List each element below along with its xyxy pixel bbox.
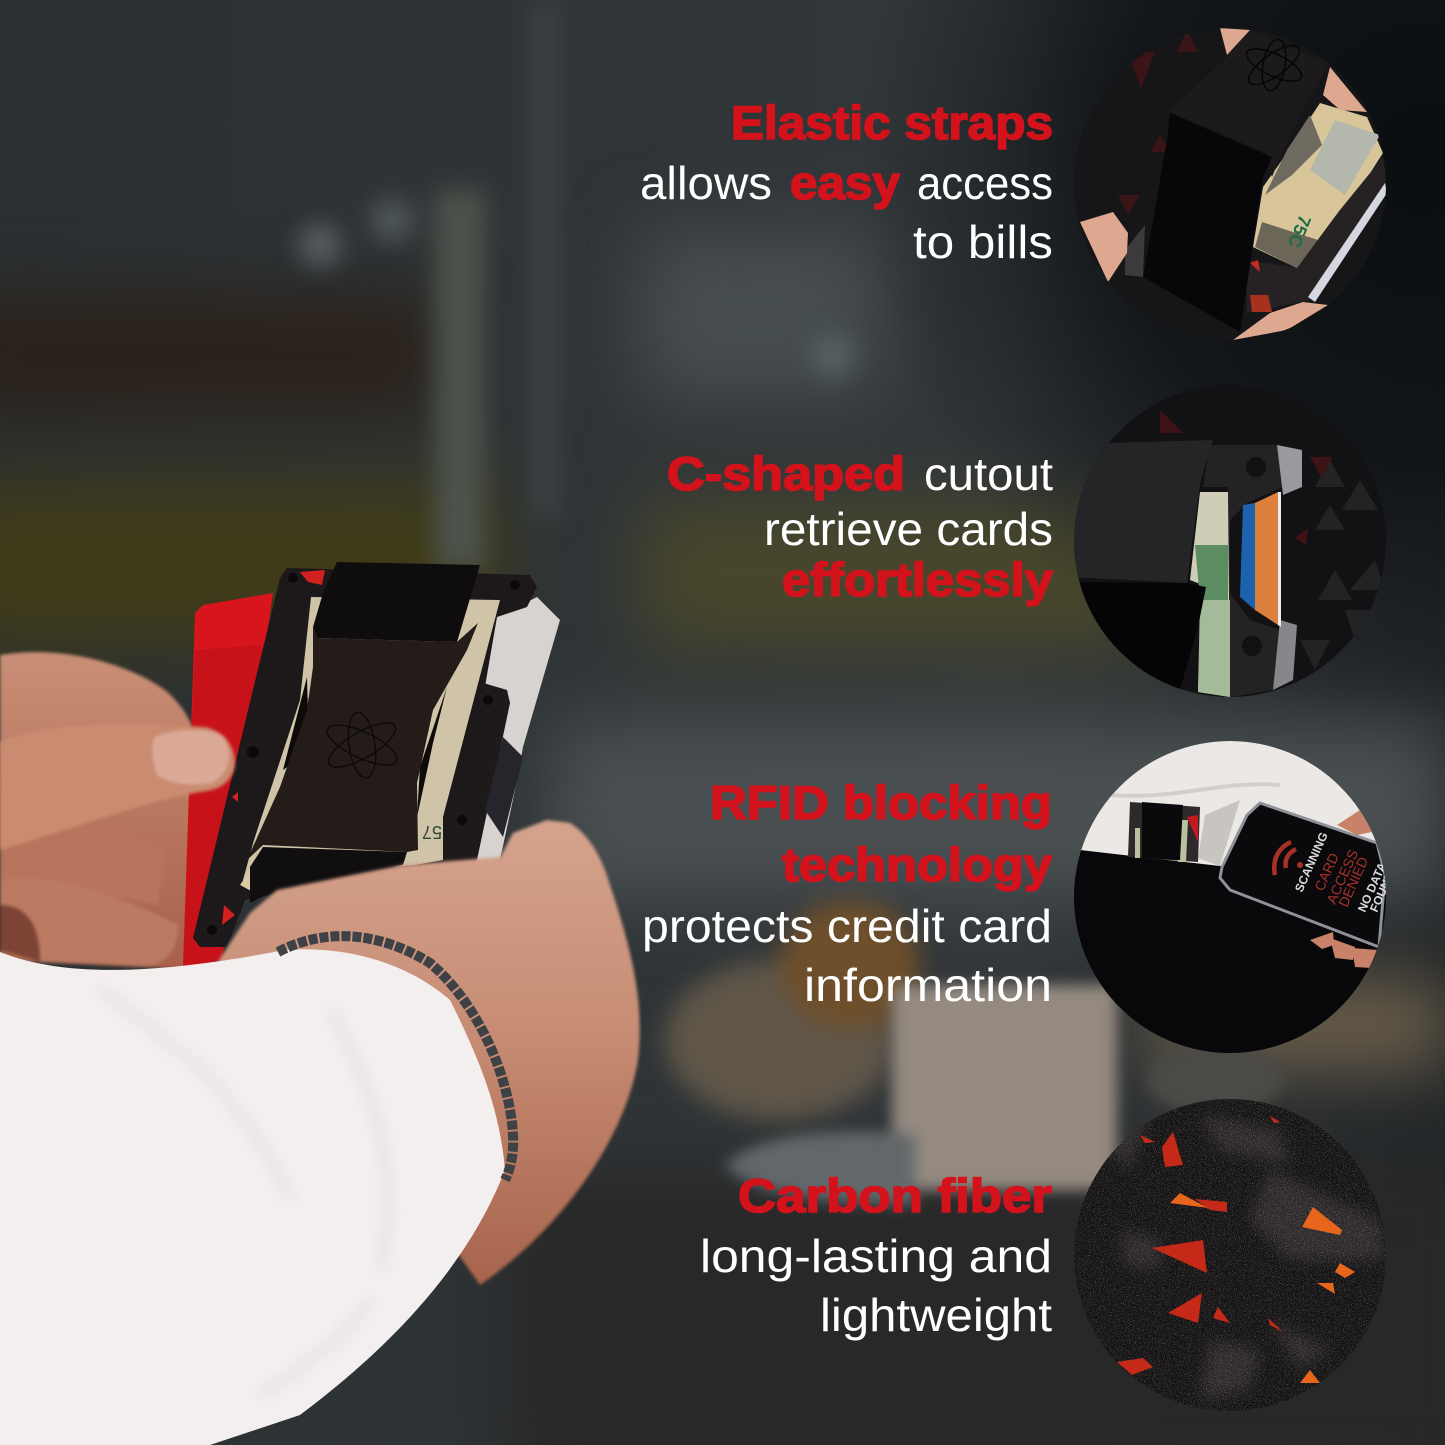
clip xyxy=(1272,170,1275,177)
carbon weave patches xyxy=(1090,1110,1385,1400)
card stack xyxy=(476,597,560,865)
elastic band bottom xyxy=(250,847,407,903)
triangle pattern xyxy=(1300,460,1385,670)
carbon frame xyxy=(1203,445,1283,697)
feature 2 text: c-shaped: C-shaped xyxy=(667,447,905,500)
feature 2 text: c-shaped: effortlessly xyxy=(782,553,1053,606)
feature 3 text: rfid: RFID blocking xyxy=(710,776,1052,829)
red flakes xyxy=(1117,1116,1283,1375)
feature 1 text: elastic straps: to bills xyxy=(913,216,1053,268)
feature 2 text: c-shaped: cutout xyxy=(924,448,1053,500)
feature 3 text: rfid: technology xyxy=(782,838,1052,891)
white shirt xyxy=(1070,735,1390,880)
feature 4 text: carbon fiber xyxy=(700,1169,1052,1341)
metal clip xyxy=(247,623,478,860)
feature 1 text: elastic straps xyxy=(640,96,1053,268)
feature 3 image circle: CARD xyxy=(1311,850,1342,893)
feature 4 image circle xyxy=(1070,1095,1390,1415)
hinges xyxy=(1277,445,1302,495)
blue stripe xyxy=(1240,503,1255,610)
feature 1 image circle xyxy=(1070,20,1390,350)
left hand fingers xyxy=(0,652,195,970)
bill value: 75C xyxy=(1284,213,1315,251)
feature 1 text: elastic straps: allows xyxy=(640,157,772,209)
feature 4 text: carbon fiber: long-lasting and xyxy=(700,1230,1052,1282)
right hand xyxy=(217,820,640,1285)
phone xyxy=(1220,803,1385,947)
small right plate xyxy=(443,682,510,862)
white shirt sleeve xyxy=(0,949,505,1445)
feature 2 text: c-shaped xyxy=(667,447,1053,606)
elastic band top xyxy=(313,562,480,642)
elastic band xyxy=(1143,113,1272,332)
folded bill xyxy=(243,597,500,880)
feature 4 text: carbon fiber: lightweight xyxy=(820,1289,1052,1341)
photo: hands holding the wallet xyxy=(0,562,640,1445)
carbon plate lower right xyxy=(1247,157,1387,313)
feature 4 text: carbon fiber: Carbon fiber xyxy=(738,1169,1052,1222)
phone text: SCANNING xyxy=(1292,830,1331,894)
elastic band xyxy=(1070,440,1213,583)
wallet xyxy=(183,562,560,967)
left thumb xyxy=(0,724,235,850)
speckle xyxy=(1070,1095,1390,1415)
feature 3 image circle: NO DATA xyxy=(1355,860,1389,914)
banknote xyxy=(1253,103,1383,268)
feature 2 text: c-shaped: retrieve cards xyxy=(764,503,1053,555)
feature 1 text: elastic straps: access xyxy=(917,157,1053,209)
orange flakes xyxy=(1170,1193,1355,1383)
gaps behind clip xyxy=(283,677,308,770)
feature 3 text: rfid: information xyxy=(804,959,1052,1011)
logo xyxy=(1246,38,1302,92)
feature 1 text: elastic straps: Elastic straps xyxy=(731,96,1053,149)
thumbnail xyxy=(152,730,229,785)
faint triangle pattern xyxy=(1118,30,1198,215)
wallet in pocket xyxy=(1128,802,1200,862)
feature 1 text: elastic straps: easy xyxy=(790,156,900,209)
holding fingers xyxy=(1310,810,1378,968)
feature 3 text: rfid xyxy=(642,776,1052,1011)
feature 3 image circle xyxy=(1070,735,1397,1060)
bill denomination: 57 xyxy=(422,822,442,842)
bracelet xyxy=(278,936,513,1180)
feature 3 image circle: DENIED xyxy=(1335,854,1371,909)
feature 3 image circle: ACCESS xyxy=(1323,847,1361,906)
screws xyxy=(207,573,520,935)
carbon plate xyxy=(193,568,537,947)
red card xyxy=(183,593,273,967)
side strap xyxy=(485,737,523,837)
fingers xyxy=(1080,28,1367,340)
logo xyxy=(322,711,402,779)
feature 3 text: rfid: protects credit card xyxy=(642,900,1052,952)
bill xyxy=(1190,492,1230,697)
screws xyxy=(1246,457,1266,477)
orange card xyxy=(1255,492,1278,625)
feature 3 image circle: FOUND xyxy=(1367,869,1397,914)
feature 2 image circle xyxy=(1070,380,1390,700)
wifi icon xyxy=(1274,842,1296,875)
